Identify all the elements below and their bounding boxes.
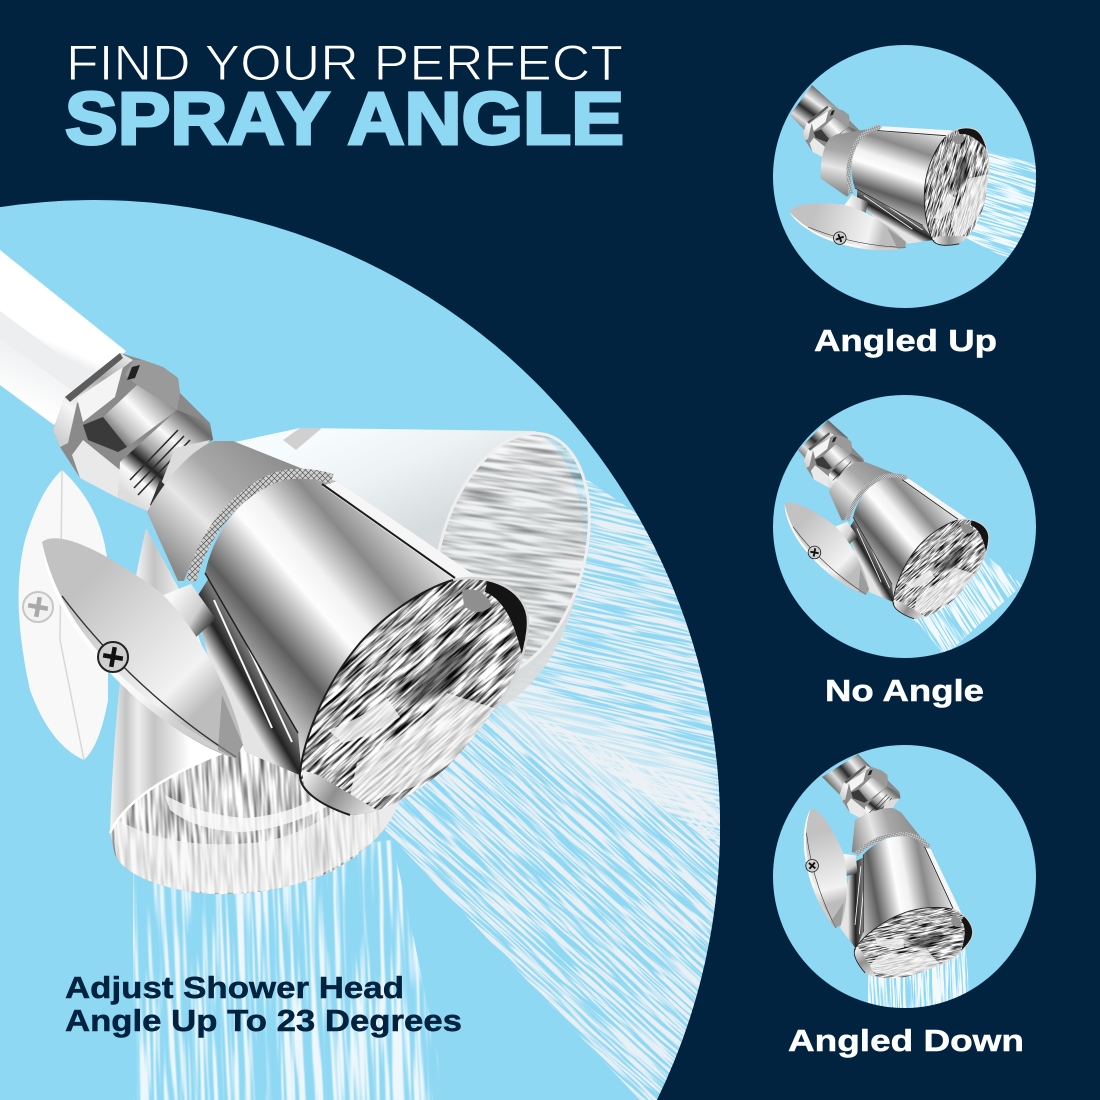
caption: adjust angle [65, 970, 462, 1038]
label: angled up: Angled Up [814, 323, 997, 358]
panel: no angle [773, 395, 1036, 658]
caption: adjust angle: Angle Up To 23 Degrees [65, 1003, 462, 1038]
main chrome shower head [42, 417, 690, 968]
pipe: angled down [822, 754, 871, 795]
water spray: bottom [133, 840, 447, 1100]
spray: angled up [966, 152, 1036, 258]
fitting: angled down [840, 765, 900, 818]
water spray: right side [385, 478, 720, 1100]
ghost head: angled up position [236, 428, 591, 705]
shower head: angled up [790, 124, 990, 250]
title line two: SPRAY ANGLE [65, 77, 624, 160]
pipe: angled up [790, 85, 839, 130]
spray: no angle [911, 556, 1021, 652]
title [65, 35, 624, 160]
pipe: no angle [798, 420, 848, 458]
ghost head: angled down position [109, 528, 399, 894]
spray: angled down [868, 948, 970, 1008]
chrome fitting [53, 353, 213, 516]
fitting: angled up [802, 106, 860, 157]
shower head: no angle [784, 462, 990, 620]
panel: main light-blue circle with shower head [0, 200, 720, 1100]
white shower arm pipe [0, 250, 126, 425]
ghost handle [19, 470, 108, 760]
panel: angled down [773, 745, 1036, 1008]
label: no angle: No Angle [825, 673, 984, 708]
shower head: angled down [804, 808, 974, 978]
title line one: FIND YOUR PERFECT [66, 35, 623, 91]
label: angled down: Angled Down [788, 1023, 1024, 1058]
caption: adjust angle: Adjust Shower Head [65, 970, 404, 1005]
panel: angled up [773, 45, 1036, 308]
fitting: no angle [804, 432, 864, 494]
